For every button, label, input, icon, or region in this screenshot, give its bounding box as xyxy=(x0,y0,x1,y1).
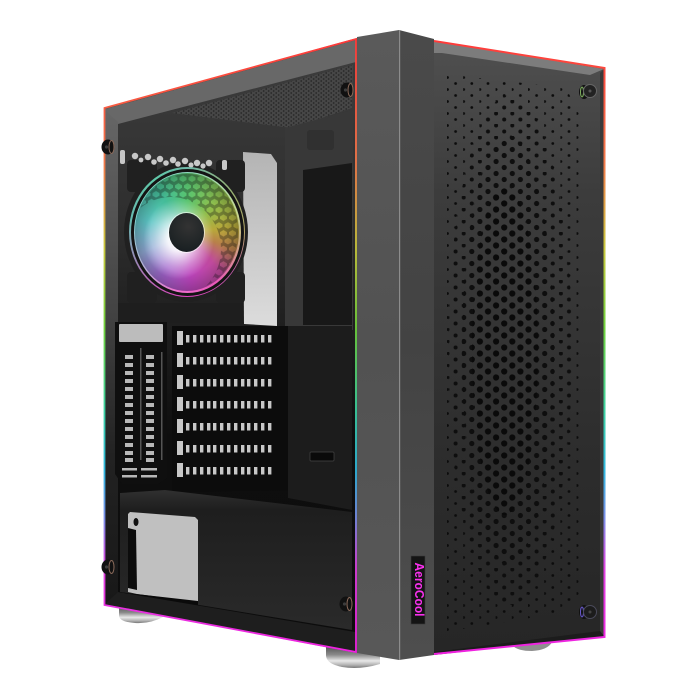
pillar left face xyxy=(357,30,399,660)
top frame strip xyxy=(105,40,356,124)
fan honeycomb overlay xyxy=(141,174,238,286)
feet xyxy=(119,604,552,668)
front screw bottom xyxy=(579,605,596,619)
right bevel xyxy=(600,69,604,636)
bottom bevel xyxy=(434,631,604,655)
PSU shroud xyxy=(120,490,352,630)
vertical bracket xyxy=(115,322,167,484)
foot: front left xyxy=(119,604,163,623)
side glass window with interior xyxy=(104,38,357,653)
perforated holes xyxy=(447,76,578,631)
right chamber frame xyxy=(285,110,353,330)
interior background xyxy=(104,38,357,653)
center pillar xyxy=(357,30,434,660)
AeroCool badge: AeroCool xyxy=(412,562,426,616)
PCI slot plate xyxy=(172,326,288,492)
case back layers: feet, side window, interior, front xyxy=(102,30,606,668)
RGB edge lights on glass xyxy=(104,39,356,652)
upper chamber notch xyxy=(307,130,334,150)
lower interior divider xyxy=(118,303,243,323)
foot: front right xyxy=(326,644,380,668)
top bevel xyxy=(434,41,604,75)
rear vent dots xyxy=(120,150,227,170)
fan frame xyxy=(124,160,248,303)
cable opening xyxy=(310,452,334,461)
screw top left xyxy=(102,140,114,154)
thumbscrews on side glass xyxy=(102,82,354,612)
front plate xyxy=(432,40,604,655)
PSU white panel xyxy=(128,512,198,602)
bracket slots xyxy=(122,348,162,478)
fan ring gap xyxy=(130,168,244,296)
pillar highlight xyxy=(399,30,400,660)
lower right chamber xyxy=(288,326,352,510)
bottom frame strip xyxy=(105,592,356,652)
cable window xyxy=(303,163,352,325)
foot: far right xyxy=(513,642,552,651)
front screw top xyxy=(579,84,596,99)
left frame strip xyxy=(105,110,118,604)
top vent mesh xyxy=(172,65,353,128)
bracket top plate xyxy=(119,324,163,342)
screw bottom left xyxy=(102,560,114,574)
PCI back plate xyxy=(172,326,288,492)
fan hub xyxy=(169,213,204,252)
icon: RGB fan xyxy=(129,167,245,297)
PSU plate xyxy=(118,512,198,605)
fan outer ring xyxy=(129,167,245,297)
fan inner ring xyxy=(134,172,240,292)
bracket back plate xyxy=(115,322,167,484)
rainbow trim lines xyxy=(434,41,604,654)
fan blades xyxy=(135,173,239,291)
PSU lower bezel xyxy=(118,592,198,605)
pillar right face xyxy=(399,30,434,660)
PSU black cutout xyxy=(128,528,137,590)
white rear bar xyxy=(243,152,277,326)
PSU mount hole xyxy=(134,518,138,526)
screw bottom right xyxy=(340,596,352,612)
front panel xyxy=(432,40,604,655)
PCI slot rows xyxy=(177,331,271,477)
screw top right xyxy=(340,82,354,98)
